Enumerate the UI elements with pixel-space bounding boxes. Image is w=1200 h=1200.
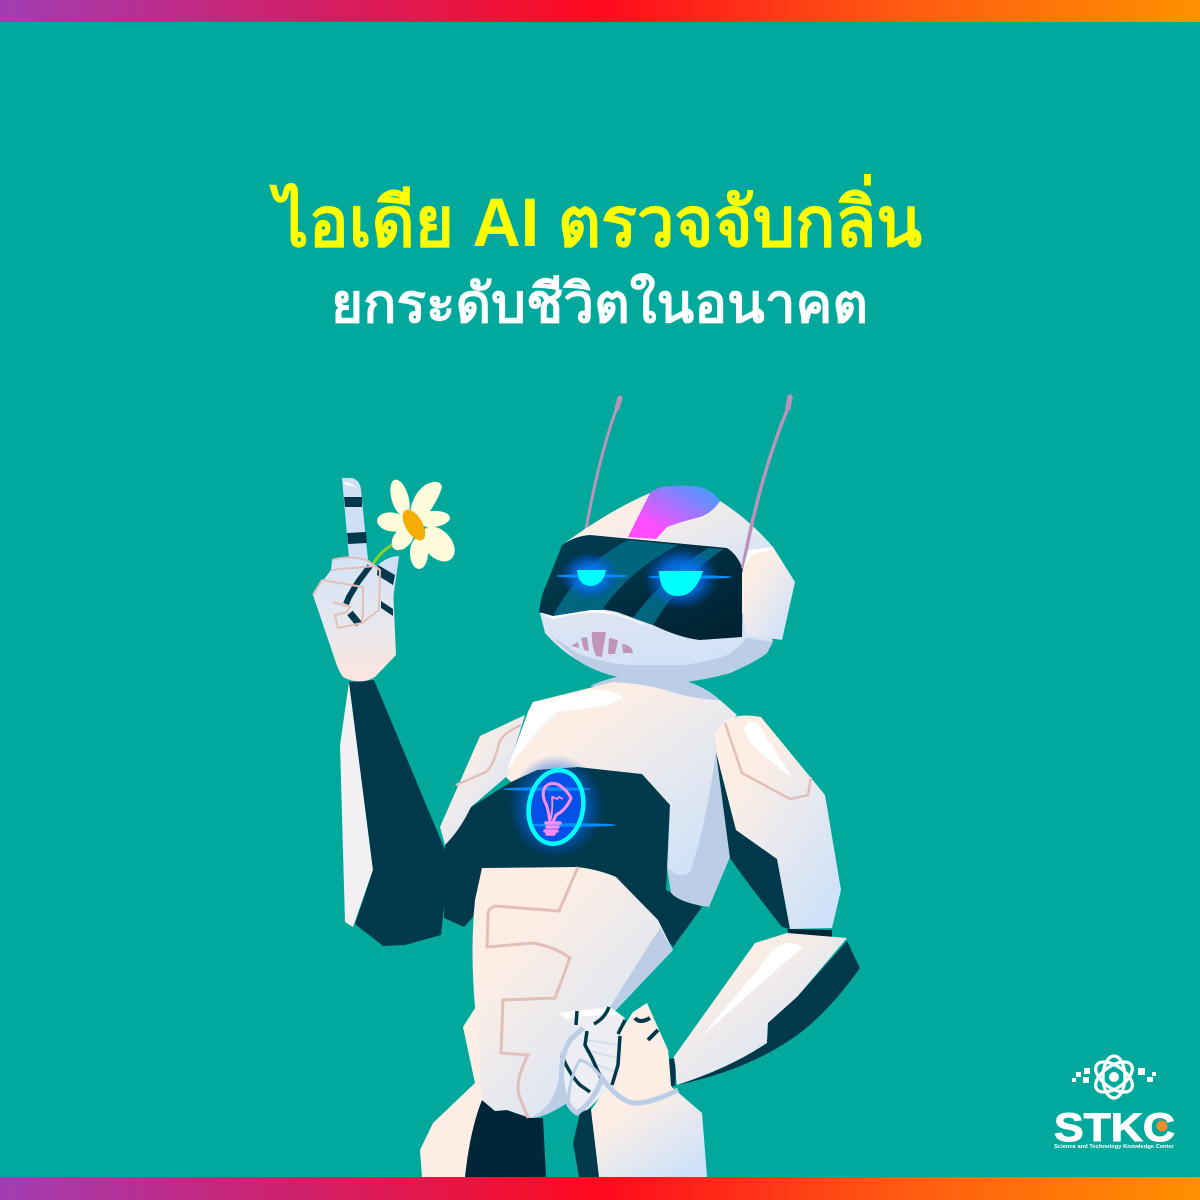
thumb [378, 556, 399, 606]
orange dot [1156, 1120, 1168, 1132]
lower hand on hip [558, 1007, 678, 1113]
eye glow [560, 552, 620, 600]
face lower [540, 600, 773, 684]
top gradient bar [0, 0, 1200, 22]
hand holding flower [313, 478, 399, 682]
chest light bulb [503, 755, 616, 859]
visor [539, 535, 743, 640]
left chest plate [440, 715, 525, 845]
right forearm [669, 933, 860, 1086]
palm [313, 558, 396, 682]
chin shade [550, 635, 773, 684]
title: ไอเดีย AI ตรวจจับกลิ่น [268, 173, 922, 261]
bottom gradient bar [0, 1177, 1200, 1200]
hips and legs [420, 1003, 707, 1177]
right upper arm [714, 715, 841, 938]
raised arm [340, 680, 447, 946]
mohawk [628, 486, 720, 539]
head [539, 397, 795, 684]
robot illustration [313, 397, 860, 1177]
visor reflections [553, 540, 723, 625]
right antenna [743, 397, 790, 567]
mouth vents [571, 632, 633, 657]
flower [376, 477, 461, 569]
index finger [342, 478, 368, 560]
dark torso band [444, 767, 702, 947]
belly armor [472, 867, 673, 1118]
subtitle: ยกระดับชีวิตในอนาคต [331, 272, 868, 334]
wordmark: STKC [1054, 1106, 1175, 1150]
eyes [577, 570, 606, 586]
logo tagline: Science and Technology Knowledge Center [1054, 1144, 1175, 1150]
upper chest [506, 674, 737, 907]
STKC logo [1054, 1056, 1175, 1150]
dome [562, 488, 773, 600]
atom icon [1090, 1056, 1138, 1098]
visor highlight [540, 609, 653, 628]
pixel dots [1072, 1068, 1156, 1083]
stem [373, 545, 392, 564]
ear [742, 547, 795, 640]
left antenna [586, 398, 620, 530]
